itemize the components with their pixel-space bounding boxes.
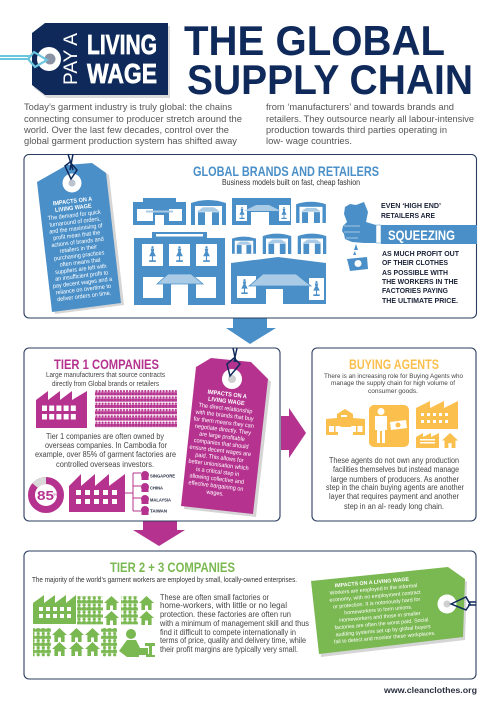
heading: tier 2 + 3: TIER 2 + 3 COMPANIES xyxy=(110,559,235,575)
header tag: pay a living wage: WAGE xyxy=(87,58,157,89)
text: tier 2 + 3 description: protection. these factories are often run xyxy=(160,610,291,619)
panel: tier 2 + 3 companies xyxy=(24,551,476,679)
magenta tag: impacts on a living wage: IMPACTS ON A xyxy=(207,389,247,400)
subheading: buying agents xyxy=(324,373,463,395)
subheading: business models: Business models built on fast, cheap fashion xyxy=(222,178,360,187)
text: tier 2 + 3 description: their profit margins are typically very small. xyxy=(160,645,298,654)
banner: squeezing: SQUEEZING xyxy=(388,227,455,243)
intro text: global garment production system has shifted away xyxy=(24,136,238,146)
text: high end retailers: OF THEIR CLOTHES xyxy=(382,258,448,267)
magenta tag: impacts on a living wage: wages. xyxy=(205,489,224,498)
text: buying agents description: step in the chain buying agents are another xyxy=(326,483,464,492)
magenta tag: impacts on a living wage: better unionisation which xyxy=(188,459,249,472)
green tag: impacts on a living wage: or protection. It is notoriously hard for xyxy=(333,597,421,610)
text: buying agents description: large numbers of producers. As another xyxy=(331,475,459,484)
intro text: low- wage countries. xyxy=(266,136,352,146)
blue tag: impacts on a living wage: an insufficient profit to xyxy=(55,270,109,283)
magenta tag: impacts on a living wage: negotiate directly. They xyxy=(194,424,251,437)
icons: factory, workers and homes xyxy=(33,595,154,656)
blue tag: impacts on a living wage: The demand for quick xyxy=(47,210,101,222)
subheading: buying agents: There is an increasing role for Buying Agents who xyxy=(324,373,463,380)
magenta tag: impacts on a living wage: effective bargaining on xyxy=(188,480,244,493)
icon: agency office xyxy=(326,409,365,435)
subheading: tier 2 + 3: The majority of the world’s garment workers are employed by small, locally-owned enterprises. xyxy=(32,577,297,584)
text: tier 2 + 3 description: terms of price, quality and delivery time, while xyxy=(160,636,306,645)
blue tag: impacts on a living wage: IMPACTS ON A xyxy=(53,196,93,207)
blue tag: impacts on a living wage: retailers in their xyxy=(59,244,98,255)
panel: tier 1 companies xyxy=(24,348,280,521)
subheading: tier 1 xyxy=(46,372,165,388)
heading: tier 1: TIER 1 COMPANIES xyxy=(54,356,159,372)
icon: fist squeezing money xyxy=(342,202,381,271)
green tag: impacts on a living wage: economy, with no employment contract xyxy=(329,590,421,604)
text: high end retailers: FACTORIES PAYING xyxy=(382,286,448,295)
text: buying agents description: These agents do not own any production xyxy=(329,456,459,465)
magenta tag: impacts on a living wage: is a critical step in xyxy=(196,467,240,478)
subheading: buying agents: consumer goods. xyxy=(368,388,418,395)
intro text: from ‘manufacturers’ and towards brands and xyxy=(266,102,454,112)
header tag: pay a living wage: LIVING xyxy=(87,29,157,60)
title: SUPPLY CHAIN xyxy=(187,56,473,103)
icon: home worker at sewing machine xyxy=(119,629,155,657)
icons: retail stores xyxy=(133,198,326,305)
magenta tag: impacts on a living wage: companies that should xyxy=(193,438,249,451)
magenta tag: impacts on a living wage: LIVING WAGE xyxy=(208,397,245,407)
legend: owner countries: SINGAPORE xyxy=(150,474,175,478)
icon: factory with overseas owners xyxy=(69,473,141,512)
blue tag: impacts on a living wage: deliver orders on time. xyxy=(57,290,112,303)
blue tag: impacts on a living wage: purchasing practices xyxy=(54,250,105,263)
title: THE GLOBAL xyxy=(184,17,445,64)
green tag: impacts on a living wage: homeworkers to form unions. xyxy=(344,605,413,617)
magenta tag: impacts on a living wage xyxy=(181,348,271,517)
intro text: production towards third parties operating in xyxy=(266,125,447,135)
icon: factories and house xyxy=(416,401,458,448)
blue tag: impacts on a living wage: actions of brands and xyxy=(51,237,104,249)
arrow: brands to tier 1 xyxy=(226,318,276,344)
intro text: connecting consumer to producer stretch around the xyxy=(24,114,242,124)
legend: owner countries: TAIWAN xyxy=(150,508,167,514)
arrow: tier 1 to buying agents xyxy=(281,408,306,458)
intro text xyxy=(23,102,474,146)
blue tag: impacts on a living wage: often means that xyxy=(59,257,101,269)
text: high end retailers: THE WORKERS IN THE xyxy=(382,277,458,286)
icon: agent with money xyxy=(369,405,409,447)
footer url: www.cleanclothes.org xyxy=(383,685,477,695)
blue tag: impacts on a living wage: reliance on overtime to xyxy=(55,284,111,297)
text: high end retailers: RETAILERS ARE xyxy=(381,211,435,220)
magenta tag: impacts on a living wage: The direct relationship xyxy=(198,403,253,415)
text: high end retailers xyxy=(381,201,459,305)
intro text: world. Over the last few decades, control over the xyxy=(23,125,229,135)
green tag: impacts on a living wage: fail to detect and monitor these workplaces. xyxy=(334,631,436,646)
green tag: impacts on a living wage xyxy=(311,567,476,657)
green tag: impacts on a living wage: IMPACTS ON A LIVING WAGE xyxy=(335,577,410,589)
text: tier 1 ownership xyxy=(35,432,177,469)
blue tag: impacts on a living wage: turnaround of orders, xyxy=(49,216,101,229)
blue tag: impacts on a living wage: pay decent wages and a xyxy=(53,277,113,290)
green tag: impacts on a living wage: factories are often the worst paid. Social xyxy=(334,617,429,631)
text: tier 1 ownership: overseas companies. In Cambodia for xyxy=(45,441,167,450)
blue tag: impacts on a living wage: profit mean that the xyxy=(53,230,101,242)
text: buying agents description: layer that requires payment and another xyxy=(329,492,459,501)
text: buying agents description xyxy=(326,456,464,511)
title xyxy=(184,17,473,103)
magenta tag: impacts on a living wage: allowing collective and xyxy=(189,473,244,486)
text: tier 2 + 3 description: These are often small factories or xyxy=(160,593,269,602)
text: high end retailers: AS POSSIBLE WITH xyxy=(382,268,448,277)
text: high end retailers: AS MUCH PROFIT OUT xyxy=(382,249,459,258)
text: high end retailers: EVEN ‘HIGH END’ xyxy=(381,201,441,210)
panel: global brands and retailers xyxy=(24,154,477,318)
text: tier 2 + 3 description: home-workers, with little or no legal xyxy=(160,601,287,610)
legend: owner countries: MALAYSIA xyxy=(150,498,171,502)
intro text: Today’s garment industry is truly global: the chains xyxy=(24,102,233,112)
heading: buying agents: BUYING AGENTS xyxy=(349,356,439,372)
blue tag: impacts on a living wage: and the maximising of xyxy=(49,223,103,236)
text: buying agents description: facilities themselves but instead manage xyxy=(333,465,459,474)
green tag: impacts on a living wage: Workers are employed in the informal xyxy=(329,583,418,597)
chart: 85 percent donut: 85 xyxy=(37,489,54,503)
legend: owner countries: CHINA xyxy=(150,486,163,490)
header tag: pay a living wage xyxy=(0,23,170,98)
text: tier 1 ownership: Tier 1 companies are often owned by xyxy=(46,432,164,441)
icon: factory xyxy=(36,391,87,428)
chart: 85 percent donut: % xyxy=(54,492,58,497)
magenta tag: impacts on a living wage: for them means they can xyxy=(193,416,254,430)
text: high end retailers: THE ULTIMATE PRICE. xyxy=(382,296,458,305)
green tag: impacts on a living wage: Homeworkers and those in smaller xyxy=(339,611,421,624)
magenta tag: impacts on a living wage: are large profitable xyxy=(199,431,245,443)
blue tag: impacts on a living wage: LIVING WAGE xyxy=(55,203,92,214)
icon: grid of workers xyxy=(95,390,177,428)
header tag: pay a living wage: PAY A xyxy=(61,33,82,85)
text: buying agents description: step in an al- ready long chain. xyxy=(344,502,444,511)
magenta tag: impacts on a living wage: with the brands that buy xyxy=(194,409,254,423)
blue tag: impacts on a living wage: suppliers are left with xyxy=(55,264,107,276)
subheading: tier 1: Large manufacturers that source contracts xyxy=(46,372,165,379)
green tag: impacts on a living wage: auditing systems set up by global buyers xyxy=(335,624,431,638)
magenta tag: impacts on a living wage: paid. This allows for xyxy=(195,452,244,464)
text: tier 2 + 3 description: find it difficult to compete internationally in xyxy=(160,628,296,637)
subheading: tier 1: directly from Global brands or retailers xyxy=(52,381,159,388)
text: tier 1 ownership: example, over 85% of garment factories are xyxy=(35,450,177,459)
panel: buying agents xyxy=(312,348,476,521)
text: tier 2 + 3 description xyxy=(159,593,309,654)
arrow: tier 1 down to tier 2 xyxy=(133,521,185,546)
magenta tag: impacts on a living wage: ensure decent wages are xyxy=(189,444,251,458)
text: tier 1 ownership: controlled overseas investors. xyxy=(56,460,154,469)
subheading: buying agents: manage the supply chain for high volume of xyxy=(331,380,455,387)
legend: owner countries xyxy=(141,471,175,515)
blue tag: impacts on a living wage xyxy=(37,154,124,314)
chart: 85 percent donut xyxy=(32,480,60,510)
heading: global brands: GLOBAL BRANDS AND RETAILERS xyxy=(193,163,379,179)
intro text: retailers. They outsource nearly all labour-intensive xyxy=(266,114,474,124)
text: tier 2 + 3 description: with a minimum of management skill and thus xyxy=(159,619,309,628)
